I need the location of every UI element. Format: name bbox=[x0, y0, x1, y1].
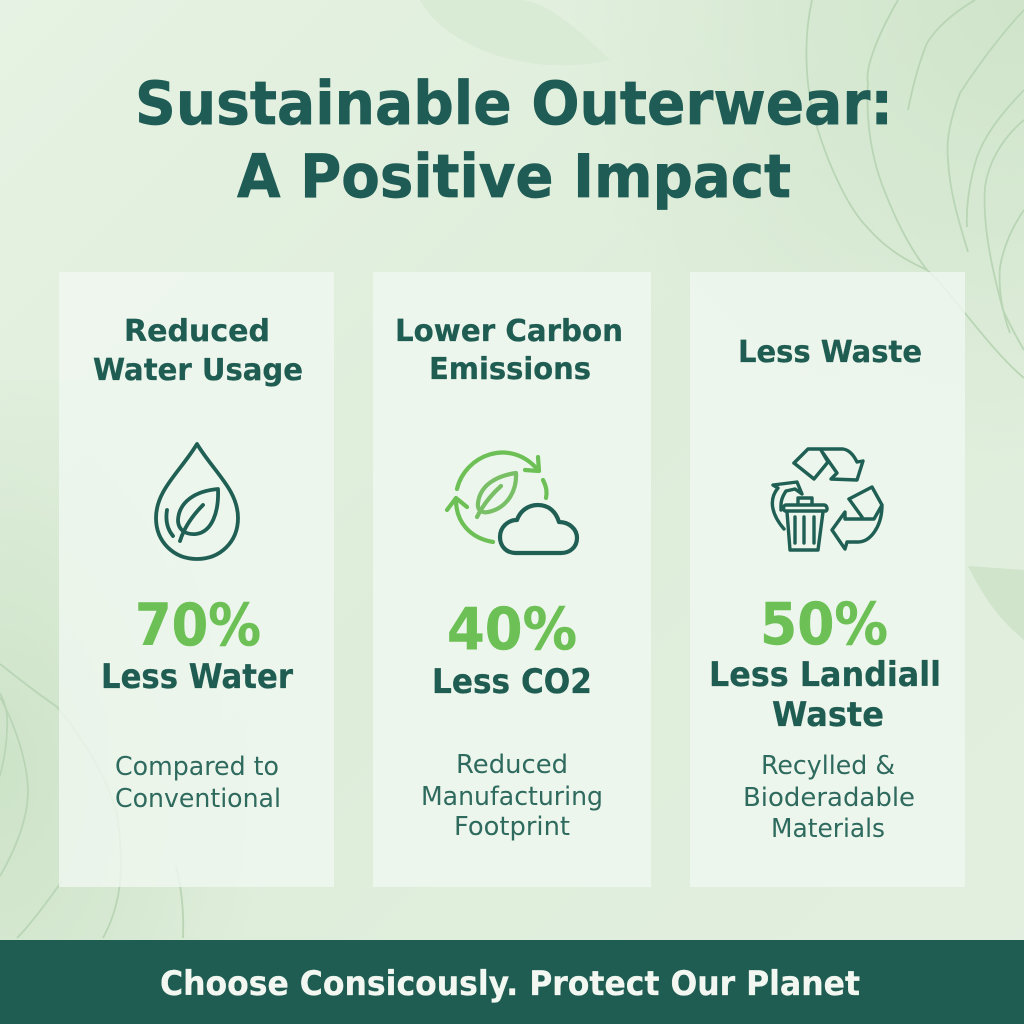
footer banner: Choose Consicously. Protect Our Planet bbox=[160, 964, 860, 1004]
label: less landfill waste: Less Landiall bbox=[709, 655, 941, 695]
title: Sustainable Outerwear: bbox=[135, 69, 893, 139]
description: carbon: Footprint bbox=[454, 812, 570, 842]
panel: carbon bbox=[373, 272, 651, 887]
title: A Positive Impact bbox=[237, 142, 791, 212]
description: waste: Recylled & bbox=[761, 751, 895, 781]
heading: water: Reduced bbox=[124, 314, 270, 349]
heading: water: Water Usage bbox=[93, 353, 303, 388]
label: less landfill waste bbox=[709, 655, 941, 735]
description: waste: Materials bbox=[771, 814, 885, 844]
description: waste bbox=[743, 751, 915, 844]
title bbox=[135, 69, 893, 212]
panel: waste bbox=[690, 272, 965, 887]
stat: 50%: 50% bbox=[760, 590, 888, 658]
stat: 40%: 40% bbox=[447, 595, 577, 663]
label: less co2: Less CO2 bbox=[432, 662, 592, 702]
icon: recycling and trash bin bbox=[772, 449, 882, 550]
heading: waste: Less Waste bbox=[738, 335, 922, 370]
footer banner bbox=[0, 940, 1024, 1024]
description: water bbox=[115, 752, 281, 814]
heading: water bbox=[93, 314, 303, 388]
description: water: Compared to bbox=[115, 752, 279, 782]
heading: carbon: Emissions bbox=[429, 352, 591, 387]
icon: recycling leaf and cloud bbox=[447, 453, 577, 553]
heading: carbon: Lower Carbon bbox=[395, 314, 623, 349]
panel: water bbox=[59, 272, 334, 887]
description: carbon: Manufacturing bbox=[421, 782, 603, 812]
heading: carbon bbox=[395, 314, 623, 387]
label: less landfill waste: Waste bbox=[772, 695, 884, 735]
description: carbon: Reduced bbox=[456, 750, 568, 780]
stat: 70%: 70% bbox=[135, 591, 261, 659]
icon: water drop with leaf bbox=[156, 444, 238, 559]
description: water: Conventional bbox=[115, 784, 281, 814]
description: waste: Bioderadable bbox=[743, 783, 915, 813]
label: less water: Less Water bbox=[101, 657, 293, 697]
description: carbon bbox=[421, 750, 603, 842]
